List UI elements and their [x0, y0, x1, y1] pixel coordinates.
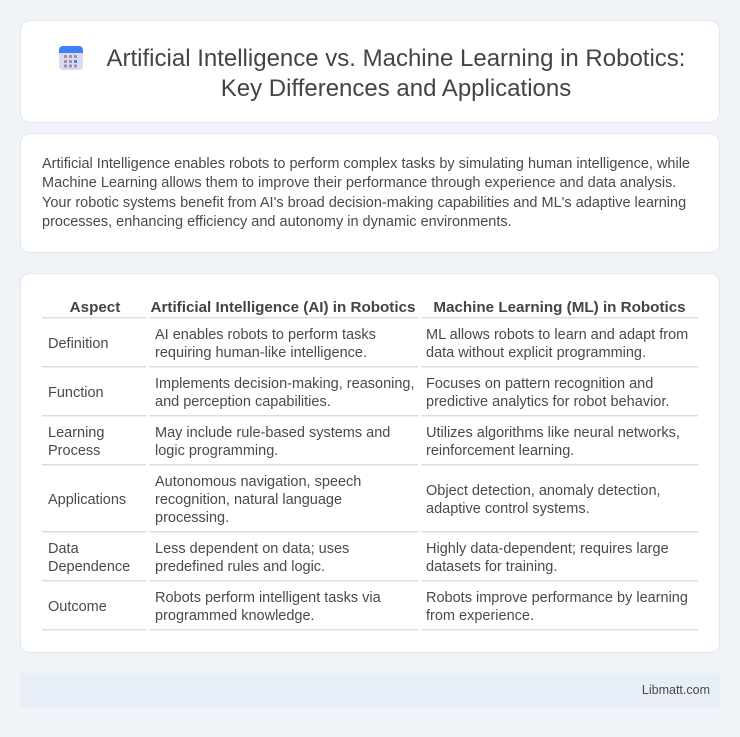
row: Learning Process [48, 425, 680, 459]
header row: Artificial Intelligence (AI) in Robotics [151, 299, 415, 316]
row: Data Dependence [48, 541, 669, 575]
row: Applications: processing. [155, 510, 229, 526]
row: Applications: Autonomous navigation, speech [155, 474, 361, 490]
row: Data Dependence: Data [48, 541, 79, 557]
row: Definition: ML allows robots to learn and adapt from [426, 327, 688, 343]
summary text: Your robotic systems benefit from AI's broad decision-making capabilities and ML's adaptive learning [42, 195, 686, 211]
row: Data Dependence: Highly data-dependent; requires large [426, 541, 669, 557]
row: Learning Process: Process [48, 443, 100, 459]
row: Outcome: programmed knowledge. [155, 608, 315, 624]
row: Definition: data without explicit programming. [426, 345, 646, 361]
header card [20, 20, 720, 123]
row: Outcome: Robots perform intelligent tasks via [155, 590, 381, 606]
title: Artificial Intelligence vs. Machine Learning in Robotics: [107, 45, 685, 72]
row: Function: Focuses on pattern recognition and [426, 376, 653, 392]
row: Applications [48, 474, 661, 526]
summary text: Artificial Intelligence enables robots to perform complex tasks by simulating human intelligence, while [42, 156, 690, 172]
row: Data Dependence: Dependence [48, 559, 130, 575]
row: Applications: Object detection, anomaly detection, [426, 483, 661, 499]
icon: calendar [59, 46, 83, 70]
row: Learning Process: May include rule-based systems and [155, 425, 390, 441]
row: Applications: adaptive control systems. [426, 501, 590, 517]
header row: Aspect [70, 299, 120, 316]
row: Learning Process: Utilizes algorithms like neural networks, [426, 425, 680, 441]
title: Key Differences and Applications [221, 75, 571, 102]
row: Function [48, 376, 669, 410]
row: Definition [48, 327, 688, 361]
row: Definition: AI enables robots to perform tasks [155, 327, 376, 343]
summary text: processes, enhancing efficiency and autonomy in dynamic environments. [42, 214, 512, 230]
summary text [42, 156, 690, 230]
footer source text: Libmatt.com [642, 683, 710, 697]
row: Outcome: from experience. [426, 608, 534, 624]
row: Definition: requiring human-like intelligence. [155, 345, 367, 361]
header row: Machine Learning (ML) in Robotics [433, 299, 686, 316]
row: Applications: recognition, natural language [155, 492, 342, 508]
row: Applications: Applications [48, 492, 126, 508]
row: Function: predictive analytics for robot behavior. [426, 394, 669, 410]
title [106, 45, 685, 102]
header row [70, 299, 686, 316]
row: Data Dependence: datasets for training. [426, 559, 557, 575]
comparison table [42, 299, 698, 631]
comparison table card [20, 273, 720, 653]
row: Outcome: Robots improve performance by learning [426, 590, 688, 606]
row: Outcome: Outcome [48, 599, 107, 615]
summary text: Machine Learning allows them to improve their performance through experience and data analysis. [42, 175, 676, 191]
row: Outcome [48, 590, 688, 624]
row: Learning Process: reinforcement learning. [426, 443, 574, 459]
footer bar [20, 673, 720, 707]
row: Definition: Definition [48, 336, 108, 352]
summary card [20, 133, 720, 253]
row: Function: and perception capabilities. [155, 394, 331, 410]
row: Function: Implements decision-making, reasoning, [155, 376, 415, 392]
row: Learning Process: logic programming. [155, 443, 278, 459]
row: Data Dependence: Less dependent on data; uses [155, 541, 349, 557]
row: Data Dependence: predefined rules and logic. [155, 559, 325, 575]
row: Learning Process: Learning [48, 425, 104, 441]
row: Function: Function [48, 385, 104, 401]
